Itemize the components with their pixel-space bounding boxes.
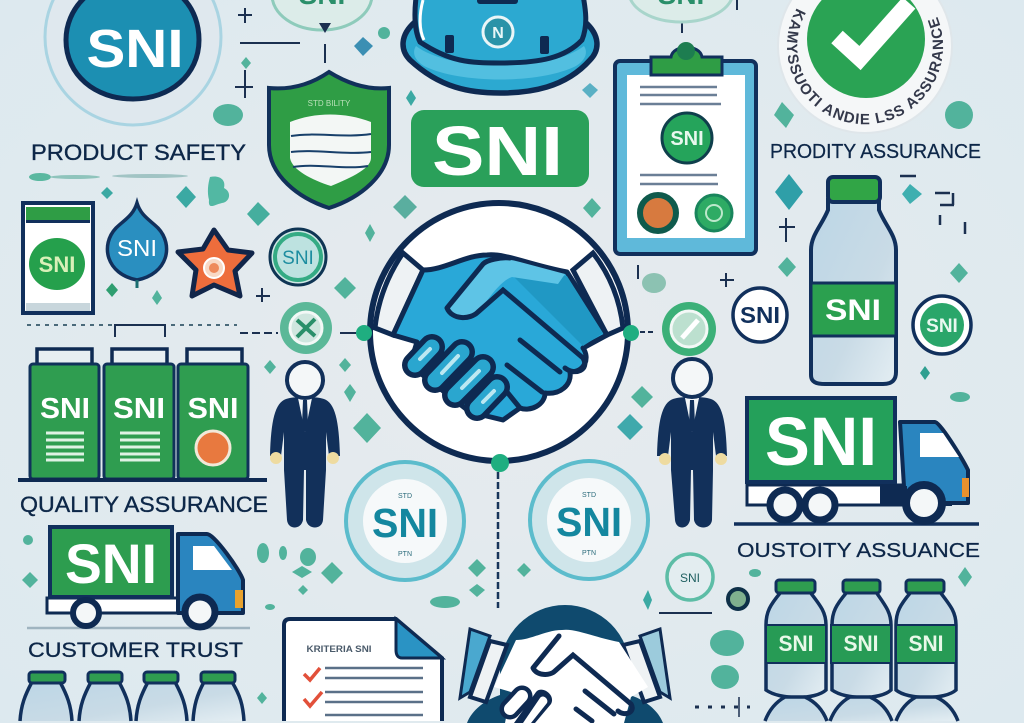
icon: checklist document: KRITERIA SNI: [306, 644, 372, 654]
icon: three water bottles: SNI: [844, 631, 878, 656]
icon: shelf of green packs: SNI: [113, 393, 165, 425]
seal: SNI left: [346, 462, 464, 580]
icon: large bottle: SNI: [825, 294, 881, 327]
badge: SNI teal circle: SNI: [282, 248, 314, 269]
badge: green SNI circle right: [913, 296, 971, 354]
icon: water drop SNI: SNI: [117, 235, 157, 261]
seal: SNI right: STD: [582, 492, 596, 499]
seal: check mark stamp: KAMYSSUOTI ANDIE LSS ASSURANCE: [787, 8, 944, 124]
figure: person right: [657, 359, 727, 528]
badge: green SNI circle right: SNI: [926, 316, 958, 337]
badge: small teal ring: [667, 554, 713, 600]
heading: product safety: PRODUCT SAFETY: [31, 140, 246, 165]
icon: checklist document: [284, 619, 442, 721]
figure: person left: [270, 362, 340, 528]
badge: SNI top left: SNI: [86, 19, 184, 79]
icon: green SNI box: SNI: [39, 252, 75, 277]
icon: delivery truck right: [734, 398, 979, 524]
heading: customer trust: CUSTOMER TRUST: [28, 639, 243, 662]
badge: SNI top centre, cropped: [272, 0, 372, 33]
heading: prodity assurance: PRODITY ASSURANCE: [770, 141, 981, 163]
badge: SNI top left: [45, 0, 221, 125]
icon: delivery truck left: [27, 527, 250, 628]
badge: green check circle: [662, 302, 716, 356]
icon: row of bottles: [20, 672, 244, 721]
icon: shield with mask: STD BILITY: [308, 99, 351, 108]
icon: helmet: [403, 0, 597, 93]
icon: water drop SNI: [107, 203, 167, 288]
seal: SNI left: STD: [398, 493, 412, 500]
badge: SNI top right, cropped: [629, 0, 733, 22]
seal: SNI right: [530, 461, 648, 579]
icon: three water bottles: [765, 580, 958, 721]
main: handshake circle: [356, 203, 639, 472]
badge: white SNI circle: SNI: [740, 302, 780, 328]
icon: large bottle: [811, 177, 896, 384]
icon: delivery truck left: SNI: [65, 532, 157, 595]
icon: three water bottles: SNI: [778, 631, 814, 656]
icon: clipboard report: SNI: [670, 128, 704, 150]
icon: shelf of green packs: [18, 349, 267, 480]
icon: shelf of green packs: SNI: [40, 393, 90, 425]
logo: SNI green plate: SNI: [432, 112, 563, 190]
icon: orange star: [178, 230, 252, 296]
heading: oustoity assuance: OUSTOITY ASSUANCE: [737, 540, 980, 562]
icon: shelf of green packs: SNI: [188, 393, 238, 425]
seal: SNI left: SNI: [372, 500, 438, 546]
seal: SNI right: SNI: [556, 499, 622, 545]
heading: quality assurance: QUALITY ASSURANCE: [20, 492, 268, 517]
badge: small teal ring: SNI: [680, 571, 700, 585]
icon: three water bottles: SNI: [908, 631, 944, 656]
connector: dashed line: [497, 472, 499, 608]
icon: clipboard report: [615, 42, 756, 254]
logo: SNI green plate: [411, 110, 589, 190]
icon: handshake bottom: [460, 605, 670, 723]
icon: green SNI box: [23, 203, 93, 313]
icon: helmet: N: [492, 25, 504, 42]
badge: white SNI circle: [733, 288, 787, 342]
badge: small dark ring: [728, 589, 748, 609]
badge: SNI teal circle: [270, 229, 326, 285]
seal: SNI left: PTN: [398, 551, 412, 558]
badge: green tool circle: [280, 302, 332, 354]
icon: delivery truck right: SNI: [765, 403, 877, 480]
icon: shield with mask: [269, 72, 389, 208]
seal: SNI right: PTN: [582, 550, 596, 557]
